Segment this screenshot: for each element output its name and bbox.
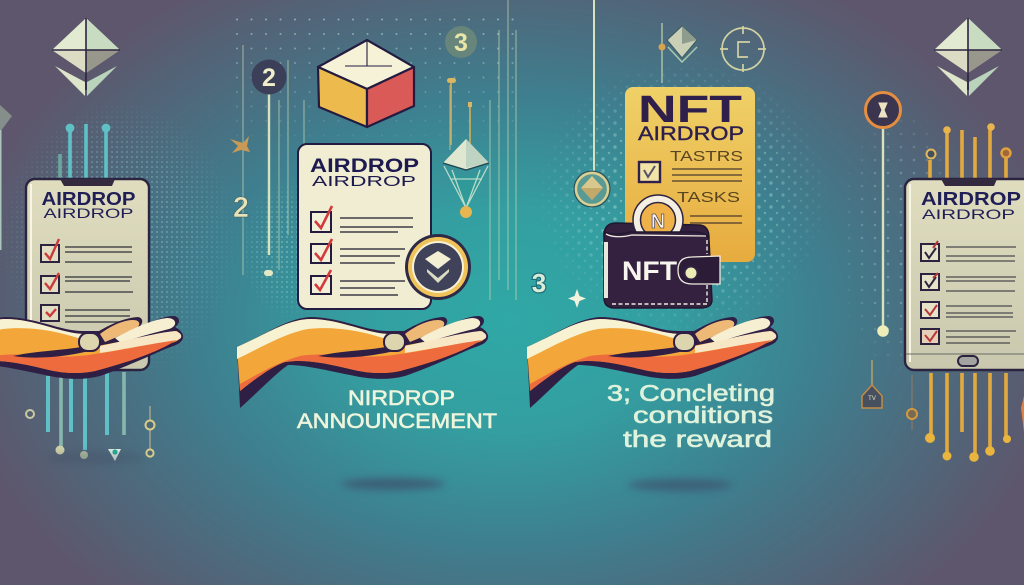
checklist xyxy=(311,206,413,295)
phone heading xyxy=(921,189,1021,222)
step marker line with badge xyxy=(866,92,900,337)
step caption: the reward xyxy=(623,426,772,452)
circuit nodes xyxy=(907,409,1011,462)
task list: TASTRS xyxy=(670,148,743,165)
icon: small lock tag xyxy=(862,360,882,408)
gold pins xyxy=(447,78,472,150)
circuit wires bottom xyxy=(48,372,124,450)
step badge 2: 2 xyxy=(262,64,276,92)
hand xyxy=(237,316,488,408)
coin: N xyxy=(651,211,665,233)
card heading xyxy=(310,156,419,190)
step caption: conditions xyxy=(633,402,773,428)
step badge 2 xyxy=(252,60,286,276)
NFT wallet: NFT xyxy=(622,256,678,286)
dot pattern halos xyxy=(0,10,965,380)
NFT wallet xyxy=(604,195,720,308)
gold circuit wires top xyxy=(926,123,1010,178)
step number 3: 3 xyxy=(532,268,546,298)
step caption xyxy=(607,380,775,452)
step caption: NIRDROP xyxy=(348,387,455,410)
phone heading: AIRDROP xyxy=(44,205,134,221)
icon: ethereum diamond left xyxy=(52,18,120,96)
gold circuit wires bottom xyxy=(912,373,1006,456)
gold task card xyxy=(625,87,755,262)
icon: diamond pendant xyxy=(443,139,489,218)
card title: AIRDROP xyxy=(638,124,744,145)
step caption xyxy=(297,387,497,433)
phone heading: AIRDROP xyxy=(922,206,1015,222)
left edge pendant xyxy=(0,105,12,250)
home button xyxy=(958,356,978,366)
step caption: 3; Concleting xyxy=(607,380,775,406)
checklist xyxy=(921,241,1016,344)
panel 1: phone announcement xyxy=(0,18,183,464)
step number 2: 2 xyxy=(233,192,249,224)
hand xyxy=(0,316,183,408)
card heading: AIRDROP xyxy=(312,174,416,190)
circuit nodes xyxy=(26,406,154,464)
phone xyxy=(905,179,1024,370)
phone heading: AIRDROP xyxy=(921,189,1021,209)
hand xyxy=(527,316,778,408)
wallet back lip xyxy=(604,223,709,238)
icon: open parcel box xyxy=(318,40,414,127)
task list: TASKS xyxy=(677,189,740,206)
panel 4: phone checklist xyxy=(862,18,1024,462)
step badge 3: 3 xyxy=(454,29,468,57)
phone heading xyxy=(42,189,136,221)
card title xyxy=(638,89,744,145)
ground shadow xyxy=(341,478,445,490)
icon: star mark xyxy=(230,136,250,153)
card title: NFT xyxy=(638,89,742,131)
card heading: AIRDROP xyxy=(310,156,419,177)
checklist xyxy=(41,239,133,322)
phone heading: AIRDROP xyxy=(42,189,136,209)
icon: ethereum diamond right xyxy=(934,18,1002,96)
task list xyxy=(639,148,743,223)
icon: sparkle xyxy=(568,289,586,308)
wallet strap xyxy=(678,256,720,284)
panel 2: airdrop announcement xyxy=(230,0,516,490)
icon: gold coin badge xyxy=(405,234,471,300)
ground shadow xyxy=(628,479,732,491)
phone xyxy=(26,179,149,370)
circuit wires top xyxy=(60,124,109,178)
icon: small diamond top xyxy=(658,23,697,83)
checklist card xyxy=(298,144,431,309)
step badge 3 xyxy=(445,26,477,58)
panel 3: completing conditions xyxy=(527,0,778,491)
hand edge xyxy=(1021,396,1024,432)
hanging line and coin xyxy=(574,0,610,207)
thin vertical lines xyxy=(243,0,516,300)
wallet body xyxy=(604,232,712,308)
step caption: ANNOUNCEMENT xyxy=(297,410,497,433)
icon: coin target xyxy=(720,26,766,72)
icon: small lock tag: TV xyxy=(868,396,876,402)
